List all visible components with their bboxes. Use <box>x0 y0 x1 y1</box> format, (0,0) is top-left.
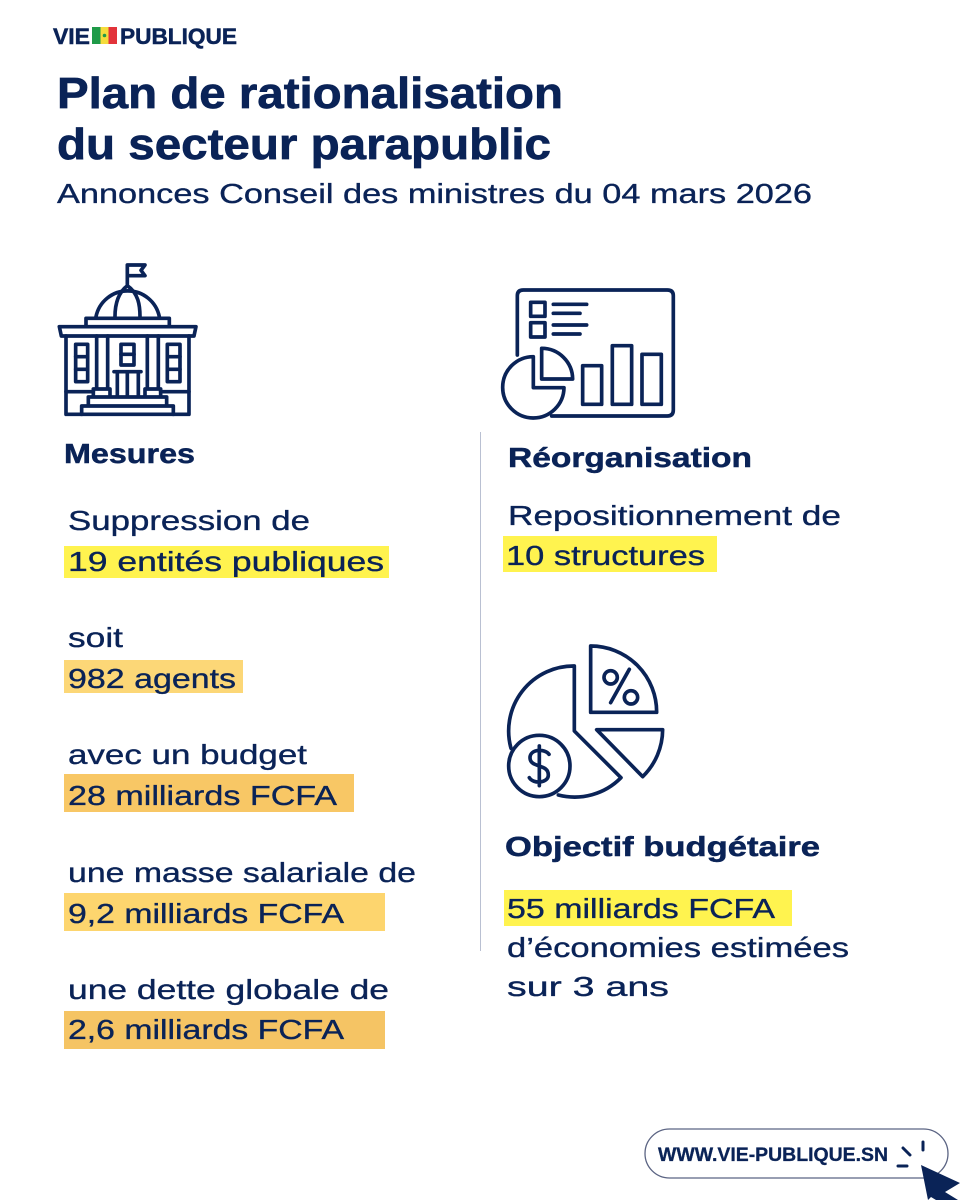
measure: payroll <box>64 857 416 931</box>
measure: budget: avec un budget <box>68 739 307 770</box>
heading: Objectif budgétaire: Objectif budgétaire <box>505 831 820 862</box>
icon: government building <box>59 265 196 414</box>
measure: entities: 19 entités publiques <box>68 546 384 577</box>
measure: budget: 28 milliards FCFA <box>68 780 338 811</box>
measure: agents: soit <box>68 622 123 653</box>
title <box>57 69 563 169</box>
panel: budget objective: d’économies estimées <box>507 932 849 963</box>
icon: click sparks <box>898 1142 923 1166</box>
heading: Réorganisation: Réorganisation <box>508 442 752 473</box>
panel: reorganisation: Repositionnement de <box>508 500 841 531</box>
measure: entities <box>64 505 389 578</box>
measure: debt <box>64 974 389 1049</box>
panel: reorganisation: 10 structures <box>506 540 705 571</box>
icon: cursor arrow <box>921 1165 960 1200</box>
measure: payroll: une masse salariale de <box>68 857 416 888</box>
website button: WWW.VIE-PUBLIQUE.SN <box>658 1145 888 1166</box>
website button <box>645 1129 960 1200</box>
panel: budget objective: 55 milliards FCFA <box>507 893 776 924</box>
logo: Vie Publique: PUBLIQUE <box>120 24 237 49</box>
title: du secteur parapublic <box>57 120 551 169</box>
heading: Mesures: Mesures <box>64 438 195 469</box>
panel: budget objective <box>504 831 849 1002</box>
measure: agents <box>64 622 243 694</box>
panel: reorganisation <box>503 442 841 572</box>
measure: entities: Suppression de <box>68 505 310 536</box>
icon: Senegal flag <box>92 27 117 44</box>
panel: budget objective: sur 3 ans <box>507 971 669 1002</box>
subtitle: Annonces Conseil des ministres du 04 mars 2026 <box>57 178 812 209</box>
measure: payroll: 9,2 milliards FCFA <box>68 898 345 929</box>
measure: debt: une dette globale de <box>68 974 389 1005</box>
icon: pie chart with percent and dollar <box>509 646 663 797</box>
logo: Vie Publique <box>53 24 237 49</box>
measure: agents: 982 agents <box>68 663 236 694</box>
panel: measures <box>64 505 416 1049</box>
logo: Vie Publique: VIE <box>53 24 90 49</box>
icon: dashboard with charts <box>503 290 673 418</box>
measure: budget <box>64 739 354 812</box>
title: Plan de rationalisation <box>57 69 563 118</box>
measure: debt: 2,6 milliards FCFA <box>68 1014 345 1045</box>
